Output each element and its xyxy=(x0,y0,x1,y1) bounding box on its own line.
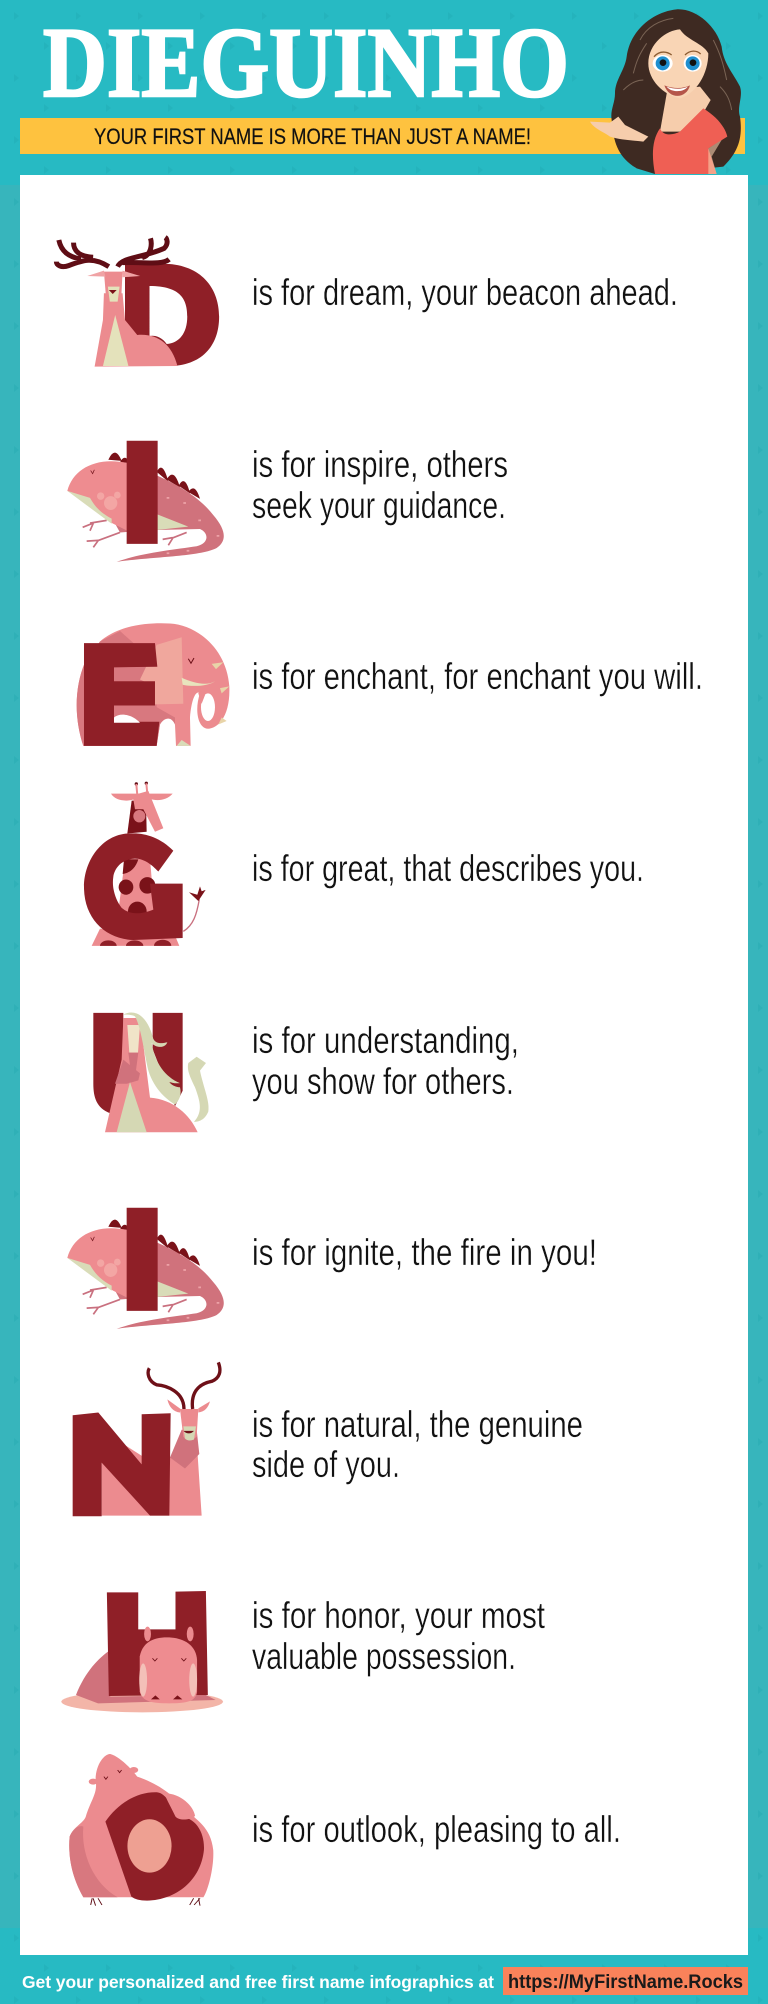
subtitle banner xyxy=(20,118,745,154)
footer xyxy=(22,1967,748,1995)
text: N lines xyxy=(252,1404,583,1485)
row O xyxy=(69,1754,621,1906)
character: woman presenting xyxy=(590,9,741,174)
text: I lines: is for inspire, others xyxy=(252,444,508,485)
text: U lines: you show for others. xyxy=(252,1061,514,1102)
row D xyxy=(56,237,678,367)
row N xyxy=(73,1362,583,1516)
subtitle banner: YOUR FIRST NAME IS MORE THAN JUST A NAME! xyxy=(94,124,531,149)
text: I line: is for ignite, the fire in you! xyxy=(252,1232,597,1273)
icon: D deer xyxy=(56,237,219,367)
row H xyxy=(61,1591,546,1712)
row G xyxy=(84,782,644,946)
text: I lines: seek your guidance. xyxy=(252,485,506,526)
text: I lines xyxy=(252,444,508,526)
text: U lines xyxy=(252,1020,519,1102)
text: H lines: valuable possession. xyxy=(252,1636,516,1677)
title: DIEGUINHO xyxy=(43,7,569,118)
icon: O gorilla xyxy=(69,1754,213,1906)
text: G line: is for great, that describes you. xyxy=(252,848,644,889)
row U xyxy=(93,1013,519,1132)
footer link badge: https://MyFirstName.Rocks xyxy=(508,1972,743,1993)
text: H lines xyxy=(252,1595,546,1677)
icon: H hippo xyxy=(61,1591,223,1712)
text: U lines: is for understanding, xyxy=(252,1020,519,1061)
icon: I iguana xyxy=(67,441,224,562)
footer text: Get your personalized and free first name infographics at xyxy=(22,1972,494,1992)
text: N lines: side of you. xyxy=(252,1444,400,1485)
row I (ignite) xyxy=(67,1208,597,1329)
icon: U horse xyxy=(93,1013,209,1132)
icon: E elephant xyxy=(77,623,229,746)
icon: G giraffe xyxy=(84,782,206,946)
text: O line: is for outlook, pleasing to all. xyxy=(252,1809,621,1850)
icon: N gazelle xyxy=(73,1362,220,1516)
icon: I iguana xyxy=(67,1208,224,1329)
text: N lines: is for natural, the genuine xyxy=(252,1404,583,1445)
row E xyxy=(77,623,703,746)
text: H lines: is for honor, your most xyxy=(252,1595,546,1636)
row I (inspire) xyxy=(67,441,508,562)
